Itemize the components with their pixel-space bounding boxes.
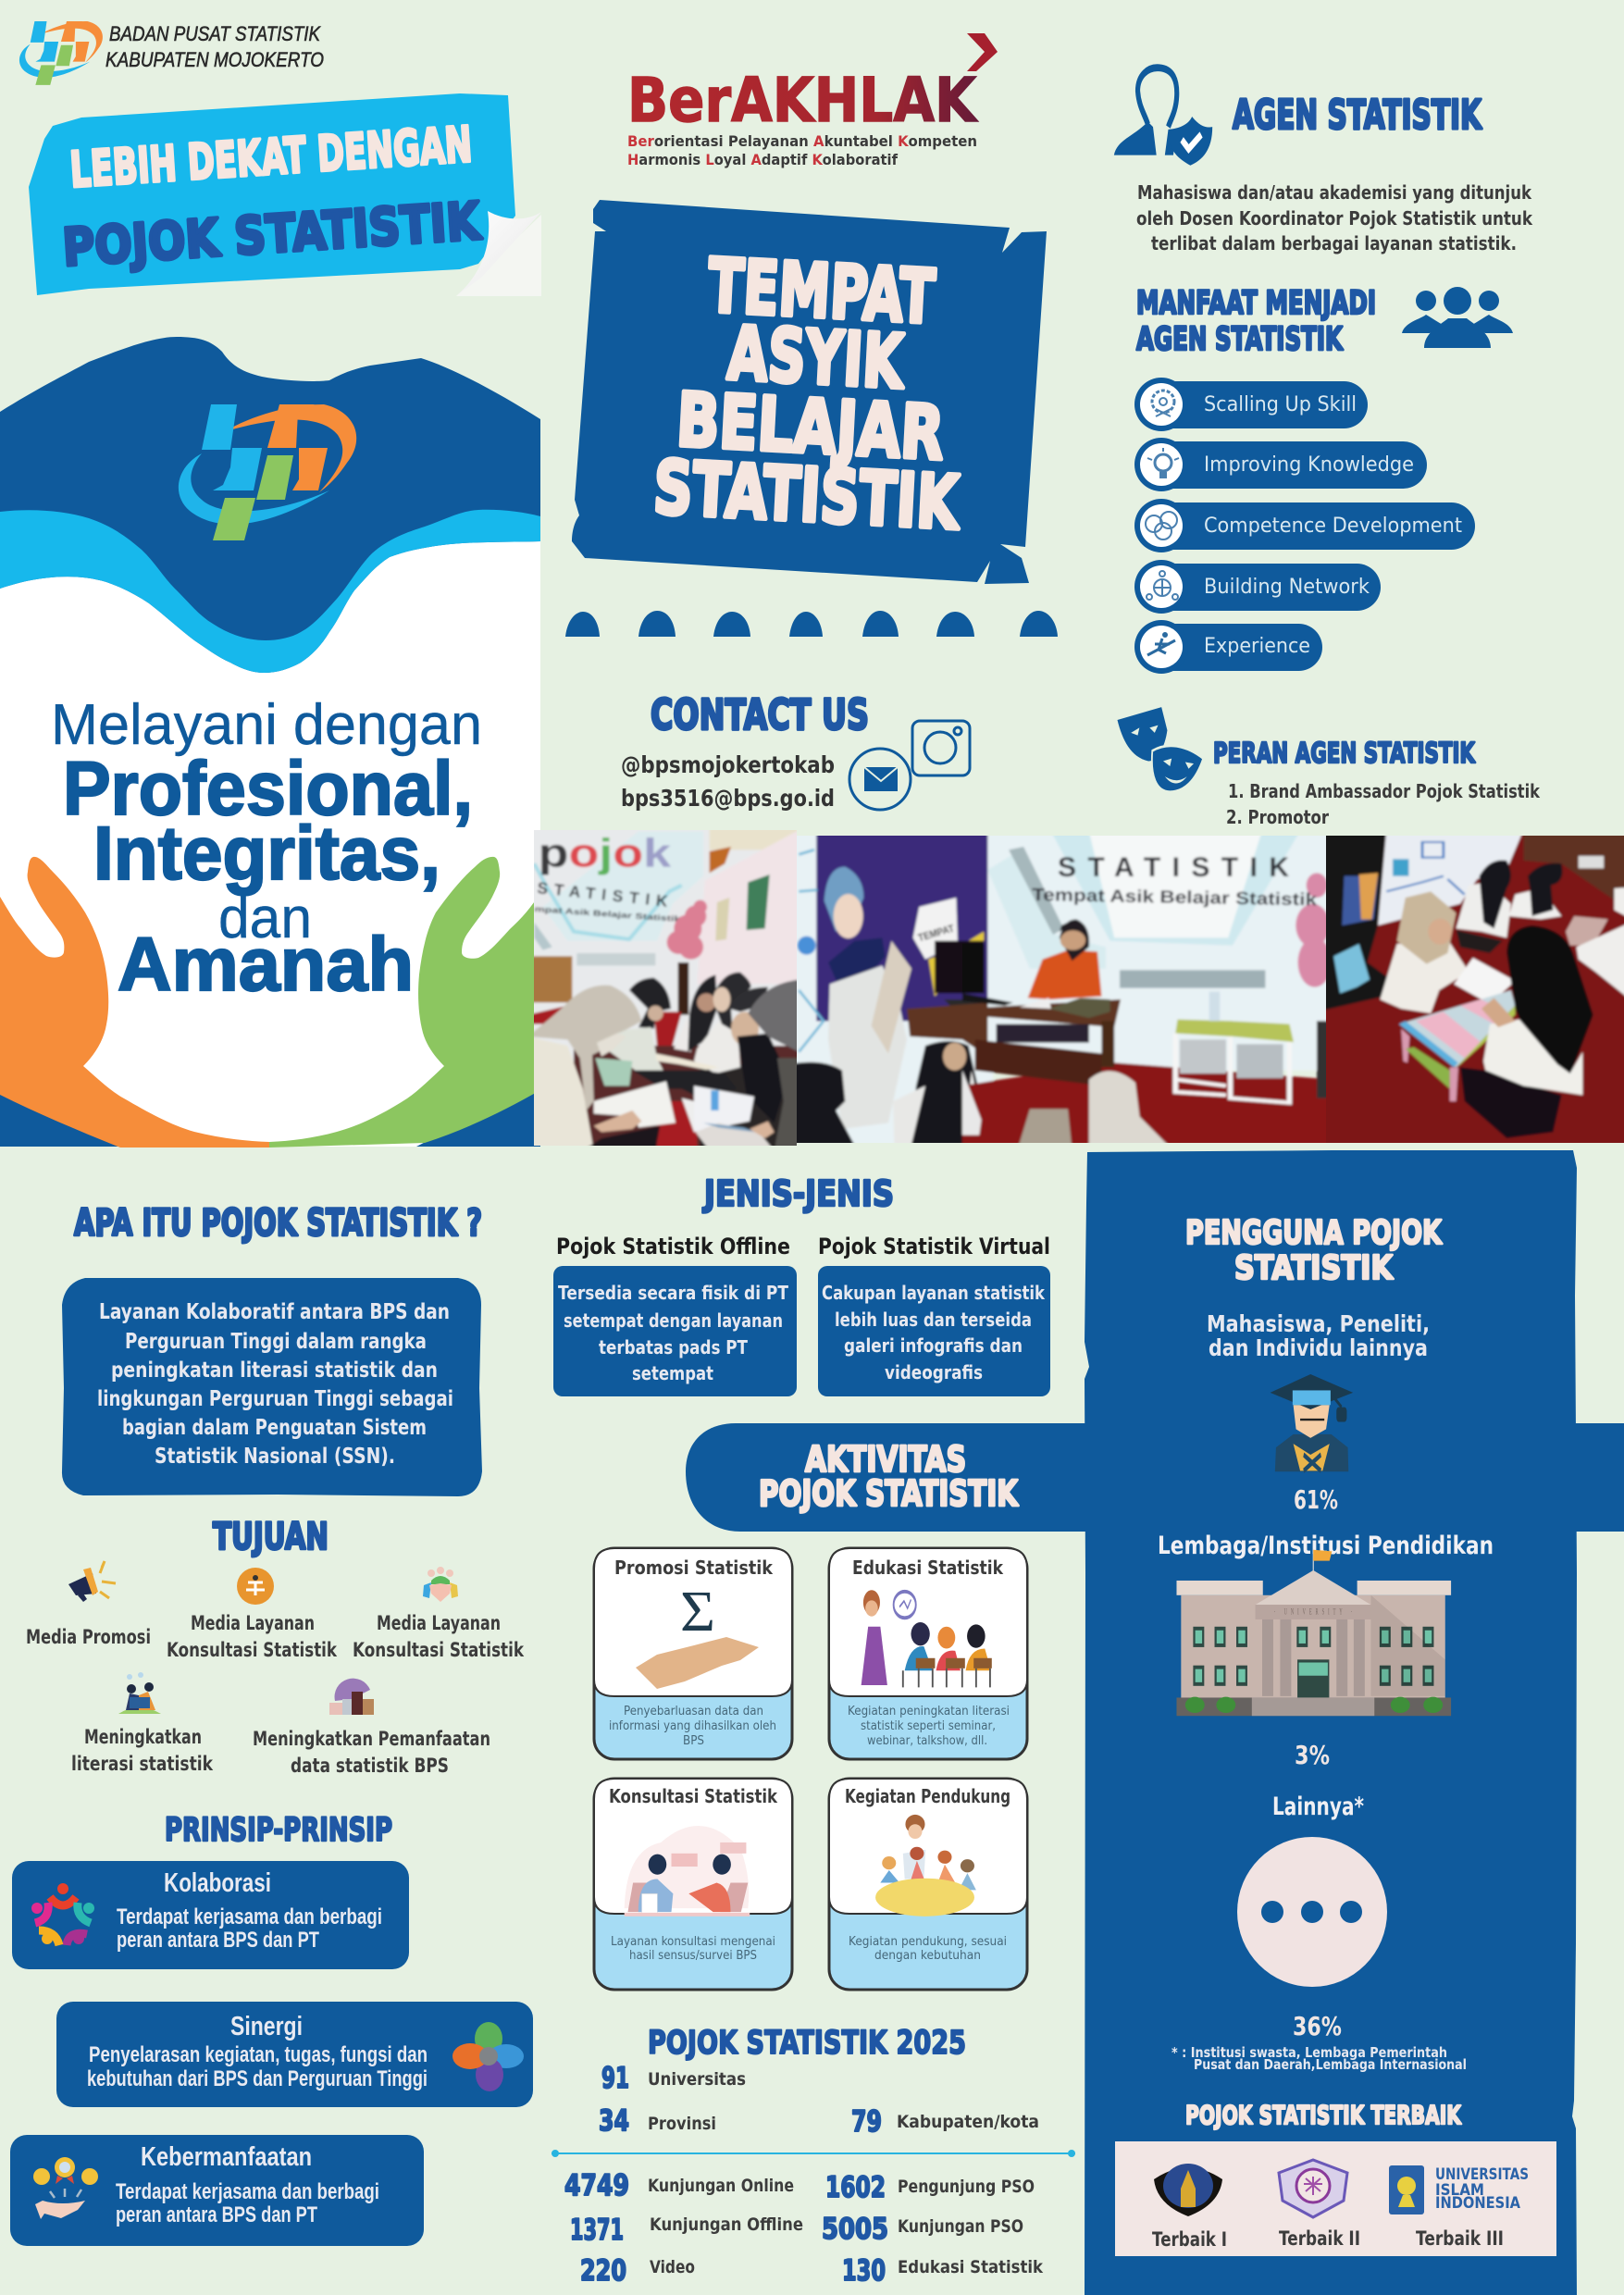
logo: Terbaik III: UNIVERSITAS — [1435, 2165, 1529, 2184]
text: agen description: terlibat dalam berbagai layanan statistik. — [1151, 232, 1517, 254]
photo: students reading at the Pojok Statistik corner: mpat Asik Belajar Statistik — [534, 904, 681, 924]
text: agen description — [1136, 181, 1533, 254]
panel: Kebermanfaatan: Terdapat kerjasama dan berbagi — [116, 2179, 379, 2204]
card: Edukasi Statistik: Edukasi Statistik — [852, 1557, 1004, 1579]
contact details: bps3516@bps.go.id — [621, 785, 835, 812]
icon: collaboration circle — [31, 1883, 94, 1945]
icon: email — [849, 749, 911, 810]
icon: synergy flower — [452, 2022, 524, 2091]
stats: numbers 2025: 1602 — [825, 2171, 886, 2204]
card: Edukasi Statistik: statistik seperti seminar, — [861, 1719, 996, 1733]
stat: 61%: 61% — [1294, 1484, 1338, 1515]
logo: Terbaik II — [1279, 2160, 1347, 2217]
stats: numbers 2025: Universitas — [648, 2069, 746, 2090]
panel: definisi: lingkungan Perguruan Tinggi sebagai — [97, 1387, 453, 1411]
card: Edukasi Statistik: webinar, talkshow, dll. — [867, 1734, 987, 1748]
text: tujuan labels — [26, 1612, 525, 1777]
panel: definisi: bagian dalam Penguatan Sistem — [122, 1416, 427, 1440]
illustration: teacher and pupils — [862, 1590, 992, 1687]
panel: Sinergi: Sinergi — [230, 2012, 303, 2041]
icon: sigma on a hand: Σ — [680, 1581, 715, 1644]
icon: BPS logo — [179, 404, 356, 540]
stats: numbers 2025: 91 — [601, 2062, 629, 2095]
stats: numbers 2025: Provinsi — [648, 2114, 716, 2134]
card: Promosi Statistik: Penyebarluasan data dan — [624, 1705, 763, 1718]
logo: Terbaik I — [1154, 2164, 1222, 2216]
heading: Agen Statistik: AGEN STATISTIK — [1233, 92, 1482, 139]
photo: students reading at the Pojok Statistik corner: pojok — [539, 832, 672, 876]
footnote: Pusat dan Daerah,Lembaga Internasional — [1194, 2056, 1467, 2073]
panel: Pojok Statistik Offline — [553, 1234, 797, 1396]
logo text: BPS Mojokerto: KABUPATEN MOJOKERTO — [105, 48, 324, 71]
heading: Pojok Statistik 2025: POJOK STATISTIK 2025 — [648, 2025, 966, 2062]
heading: Pengguna Pojok Statistik: STATISTIK — [1234, 1249, 1394, 1287]
illustration: group around a table — [875, 1815, 976, 1917]
heading: Pojok Statistik: POJOK STATISTIK — [61, 192, 484, 279]
photo: staff at the service desk: TEMPAT — [917, 924, 956, 944]
icon: small BPS logo — [19, 21, 103, 85]
panel: best universities: Terbaik III — [1416, 2227, 1504, 2250]
contact details — [621, 751, 835, 812]
stats: numbers 2025: Kunjungan Online — [648, 2176, 794, 2196]
pill: Scalling Up Skill: Scalling Up Skill — [1204, 393, 1357, 416]
photo: staff at the service desk — [789, 824, 1333, 1150]
card: Konsultasi Statistik: Layanan konsultasi mengenai — [611, 1935, 775, 1949]
pill: Experience: Experience — [1204, 635, 1310, 658]
banner: Lebih dekat dengan Pojok Statistik — [29, 93, 541, 296]
logo: Terbaik III: ISLAM — [1435, 2181, 1484, 2200]
stats: numbers 2025: 79 — [851, 2105, 882, 2139]
panel: definisi — [62, 1278, 482, 1496]
text: tujuan labels: Media Layanan — [377, 1612, 501, 1634]
panel: Pojok Statistik Offline: Pojok Statistik Offline — [556, 1234, 790, 1259]
panel: definisi: peningkatan literasi statistik dan — [111, 1358, 438, 1383]
text: motto: Amanah — [118, 923, 414, 1007]
text: Lembaga/Institusi Pendidikan: Lembaga/Institusi Pendidikan — [1158, 1532, 1494, 1560]
text: Lainnya: Lainnya* — [1272, 1793, 1364, 1821]
card: Kegiatan Pendukung — [829, 1779, 1027, 1990]
text: tujuan labels: Konsultasi Statistik — [167, 1639, 338, 1661]
card: Promosi Statistik: informasi yang dihasilkan oleh — [609, 1719, 776, 1733]
text: tujuan labels: Media Layanan — [191, 1612, 315, 1634]
panel: Tempat Asyik Belajar Statistik: ASYIK — [725, 310, 908, 405]
panel: Kebermanfaatan: peran antara BPS dan PT — [116, 2202, 317, 2227]
panel: Kebermanfaatan — [10, 2135, 424, 2246]
card: Promosi Statistik: BPS — [683, 1734, 704, 1748]
heading: Pengguna Pojok Statistik — [1185, 1214, 1443, 1287]
pill: Competence Development: Competence Development — [1204, 515, 1462, 538]
panel: Pojok Statistik Offline: setempat dengan layanan — [564, 1309, 783, 1332]
panel: definisi: Statistik Nasional (SSN). — [155, 1445, 395, 1469]
hand: orange — [0, 857, 269, 1148]
pill: Experience — [1134, 620, 1322, 674]
stat: 36%: 36% — [1293, 2011, 1342, 2041]
heading: Lebih dekat dengan: LEBIH DEKAT DENGAN — [68, 117, 474, 199]
stats: numbers 2025: 130 — [842, 2254, 886, 2288]
panel: Pojok Statistik Offline: setempat — [632, 1362, 713, 1384]
stats: numbers 2025: Kunjungan PSO — [898, 2216, 1023, 2237]
icon: data and books — [329, 1679, 374, 1715]
icon: graduate — [1271, 1374, 1353, 1471]
panel: Pojok Statistik Virtual: lebih luas dan terseida — [835, 1309, 1032, 1331]
photo: students reading at the Pojok Statistik corner: STATISTIK — [537, 878, 669, 911]
stats: numbers 2025: Edukasi Statistik — [898, 2257, 1043, 2277]
heading: Pojok Statistik Terbaik: POJOK STATISTIK TERBAIK — [1185, 2100, 1462, 2130]
panel: Pojok Statistik Virtual: Cakupan layanan statistik — [822, 1282, 1046, 1304]
panel: Pojok Statistik Virtual: Pojok Statistik Virtual — [818, 1234, 1050, 1259]
panel: best universities: Terbaik I — [1152, 2228, 1227, 2251]
bottom corner shapes — [0, 1083, 540, 1147]
icon: university building: · UNIVERSITY · — [1274, 1606, 1352, 1617]
card: Konsultasi Statistik: Konsultasi Statistik — [609, 1785, 778, 1807]
heading: Jenis-jenis: JENIS-JENIS — [701, 1173, 894, 1214]
stats: numbers 2025: 34 — [599, 2104, 629, 2138]
heading: Manfaat menjadi agen statistik: MANFAAT MENJADI — [1136, 285, 1376, 322]
heading: Manfaat menjadi agen statistik — [1136, 285, 1376, 358]
panel: Tempat Asyik Belajar Statistik: TEMPAT — [706, 242, 937, 341]
icon: handshake — [423, 1567, 458, 1602]
card: Konsultasi Statistik — [594, 1779, 792, 1990]
card: Edukasi Statistik: Kegiatan peningkatan literasi — [848, 1705, 1010, 1718]
photo: students reading at a pastel table — [1317, 830, 1624, 1150]
icon: reading together — [118, 1672, 161, 1714]
stats: numbers 2025: 4749 — [564, 2169, 629, 2202]
contact details: @bpsmojokertokab — [621, 751, 835, 778]
panel: Pojok Statistik Virtual: videografis — [885, 1361, 983, 1383]
text: mahasiswa — [1207, 1310, 1430, 1361]
panel: Sinergi — [56, 2002, 533, 2107]
panel: definisi: Layanan Kolaboratif antara BPS dan — [99, 1300, 450, 1324]
stats: numbers 2025: Pengunjung PSO — [898, 2177, 1035, 2197]
illustration: consultation — [625, 1826, 750, 1917]
text: tujuan labels: data statistik BPS — [291, 1755, 449, 1777]
logo: BerAKHLAK: Harmonis Loyal Adaptif Kolaboratif — [627, 151, 899, 168]
icon: page curl — [456, 211, 541, 296]
text: tujuan labels: Media Promosi — [26, 1626, 151, 1648]
panel: best universities: Terbaik II — [1279, 2227, 1360, 2250]
heading: Peran agen statistik: PERAN AGEN STATISTIK — [1213, 738, 1476, 770]
panel: Pojok Statistik Offline: Tersedia secara fisik di PT — [558, 1282, 788, 1304]
stats: numbers 2025: 1371 — [570, 2214, 624, 2247]
text: tujuan labels: Konsultasi Statistik — [353, 1639, 525, 1661]
text: mahasiswa: Mahasiswa, Peneliti, — [1207, 1310, 1430, 1337]
banner: Aktivitas Pojok Statistik: AKTIVITAS — [805, 1439, 966, 1480]
text: motto: Integritas, — [93, 812, 440, 896]
list: peran: 2. Promotor — [1226, 806, 1329, 828]
panel: Kolaborasi: peran antara BPS dan PT — [117, 1928, 319, 1953]
icon: university building — [1176, 1550, 1451, 1716]
panel: Kolaborasi: Terdapat kerjasama dan berbagi — [117, 1904, 382, 1929]
hand: green — [269, 857, 540, 1148]
icon: more dots — [1237, 1837, 1387, 1987]
card: Edukasi Statistik — [829, 1548, 1027, 1759]
stat: 3%: 3% — [1295, 1740, 1330, 1770]
icon: people — [1402, 287, 1513, 348]
panel: Pojok Statistik Offline: terbatas pads PT — [599, 1336, 748, 1358]
list: peran — [1226, 780, 1541, 828]
icon: instagram — [912, 721, 970, 775]
panel: Tempat Asyik Belajar Statistik: BELAJAR — [675, 377, 946, 477]
card: Kegiatan Pendukung: Kegiatan Pendukung — [845, 1785, 1010, 1807]
panel: Sinergi: Penyelarasan kegiatan, tugas, fungsi dan — [89, 2042, 428, 2067]
list: peran: 1. Brand Ambassador Pojok Statistik — [1228, 780, 1541, 802]
heading: Pengguna Pojok Statistik: PENGGUNA POJOK — [1185, 1214, 1443, 1252]
logo: BerAKHLAK — [627, 33, 998, 168]
pill: Competence Development — [1134, 499, 1475, 552]
list: manfaat pills — [1134, 378, 1475, 674]
card: Promosi Statistik: Promosi Statistik — [614, 1557, 774, 1579]
heading: Prinsip-prinsip: PRINSIP-PRINSIP — [165, 1812, 392, 1849]
pill: Building Network — [1134, 560, 1381, 614]
logo text: BPS Mojokerto — [105, 22, 324, 71]
card: Kegiatan Pendukung: dengan kebutuhan — [874, 1949, 981, 1963]
pill: Building Network: Building Network — [1204, 576, 1370, 599]
text: mahasiswa: dan Individu lainnya — [1209, 1334, 1428, 1361]
stats: numbers 2025: Kunjungan Offline — [650, 2214, 803, 2235]
text: tujuan labels: literasi statistik — [71, 1753, 214, 1775]
logo text: BPS Mojokerto: BADAN PUSAT STATISTIK — [109, 22, 321, 45]
icon: sigma on a hand — [636, 1581, 759, 1689]
panel: Tempat Asyik Belajar Statistik: STATISTIK — [651, 444, 963, 546]
card: Promosi Statistik — [594, 1548, 792, 1759]
panel: Kolaborasi: Kolaborasi — [164, 1868, 271, 1898]
icon: consultation badge — [237, 1568, 274, 1605]
stats: numbers 2025: Video — [650, 2257, 695, 2277]
stats: numbers 2025: 5005 — [822, 2213, 888, 2246]
icon: theatre masks — [1118, 707, 1203, 792]
card: Kegiatan Pendukung: Kegiatan pendukung, sesuai — [849, 1935, 1007, 1949]
panel: Kebermanfaatan: Kebermanfaatan — [141, 2142, 312, 2172]
panel: Pojok Statistik Virtual: galeri infografis dan — [844, 1334, 1023, 1357]
logo: BerAKHLAK: Berorientasi Pelayanan Akuntabel Kompeten — [627, 132, 977, 150]
photo text: Statistik sign: STATISTIK — [1058, 852, 1289, 883]
panel: Pojok Statistik Virtual — [818, 1234, 1050, 1396]
tape domes row — [565, 611, 1058, 637]
icon: hand with medals — [33, 2157, 98, 2219]
heading: Tujuan: TUJUAN — [213, 1516, 329, 1558]
panel: Kolaborasi — [12, 1861, 409, 1969]
text: motto — [51, 693, 482, 1007]
stats: numbers 2025 — [564, 2062, 1043, 2288]
footnote: * : Institusi swasta, Lembaga Pemerintah — [1172, 2044, 1447, 2061]
stats: numbers 2025: Kabupaten/kota — [897, 2112, 1039, 2132]
panel: definisi: Perguruan Tinggi dalam rangka — [125, 1330, 427, 1354]
panel: motto with BPS logo — [0, 337, 540, 1148]
banner: Aktivitas Pojok Statistik — [686, 1423, 1624, 1532]
logo: BerAKHLAK: BerAKHLAK — [627, 65, 979, 136]
footnote — [1172, 2044, 1467, 2073]
pill: Improving Knowledge — [1134, 438, 1427, 491]
panel: Sinergi: kebutuhan dari BPS dan Perguruan Tinggi — [87, 2066, 428, 2091]
photo text: Statistik sign — [1032, 852, 1318, 910]
stats: numbers 2025: 220 — [580, 2254, 626, 2288]
panel: best universities — [1115, 2141, 1556, 2256]
divider line — [552, 2150, 1075, 2157]
text: agen description: Mahasiswa dan/atau akademisi yang ditunjuk — [1137, 181, 1532, 204]
icon: agent with shield — [1114, 68, 1212, 166]
heading: Contact Us: CONTACT US — [651, 690, 869, 739]
pill: Improving Knowledge: Improving Knowledge — [1204, 453, 1414, 477]
text: motto: Profesional, — [63, 747, 473, 831]
panel: Tempat Asyik Belajar Statistik — [572, 200, 1047, 584]
panel: Pengguna Pojok Statistik column — [1085, 1150, 1577, 2295]
text: tujuan labels: Meningkatkan — [84, 1726, 202, 1748]
logo: Terbaik III: INDONESIA — [1435, 2194, 1521, 2213]
logo: Terbaik III — [1389, 2165, 1529, 2214]
photo text: Statistik sign: Tempat Asik Belajar Statistik — [1032, 886, 1318, 910]
heading: Apa itu Pojok Statistik: APA ITU POJOK STATISTIK ? — [74, 1202, 482, 1245]
text: agen description: oleh Dosen Koordinator Pojok Statistik untuk — [1136, 207, 1533, 230]
card: Konsultasi Statistik: hasil sensus/survei BPS — [629, 1949, 757, 1963]
text: motto: dan — [218, 887, 312, 950]
pill: Scalling Up Skill — [1134, 378, 1368, 431]
text: motto: Melayani dengan — [51, 693, 482, 757]
heading: Manfaat menjadi agen statistik: AGEN STATISTIK — [1136, 321, 1344, 358]
photo: students reading at the Pojok Statistik corner — [527, 824, 805, 1150]
icon: megaphone — [68, 1561, 116, 1602]
text: tujuan labels: Meningkatkan Pemanfaatan — [253, 1728, 490, 1750]
banner: Aktivitas Pojok Statistik: POJOK STATISTIK — [759, 1473, 1019, 1514]
